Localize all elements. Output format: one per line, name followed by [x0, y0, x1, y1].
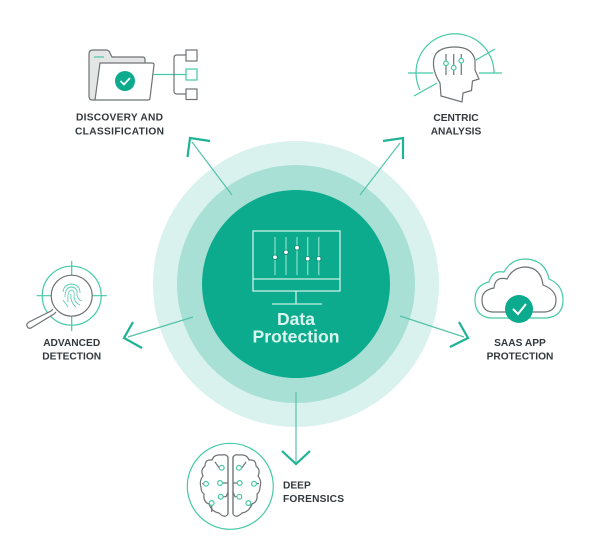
- icon: cloud with check: [475, 259, 563, 323]
- label: centric analysis: [431, 113, 481, 138]
- icon: brain in circle: [187, 443, 273, 529]
- label: advanced detection: [42, 338, 101, 362]
- label: centric analysis: ANALYSIS: [431, 126, 481, 138]
- icon: folder with tree: [89, 50, 197, 100]
- label: advanced detection: DETECTION: [42, 352, 101, 362]
- label: saas app protection: PROTECTION: [487, 352, 553, 362]
- arrow: to discovery: [188, 138, 232, 195]
- label: discovery and classification: [75, 113, 164, 138]
- label: advanced detection: ADVANCED: [43, 338, 100, 349]
- icon: monitor with sliders: [253, 231, 340, 304]
- arrow: to SaaS app protection: [400, 316, 468, 347]
- icon: head with sliders: [408, 34, 502, 102]
- label: centric analysis: CENTRIC: [433, 113, 479, 124]
- label: deep forensics: FORENSICS: [283, 494, 344, 505]
- arrow: to deep forensics: [282, 392, 310, 464]
- label: saas app protection: [487, 338, 553, 362]
- icon: magnifier with fingerprint: [27, 261, 107, 331]
- label: deep forensics: [283, 481, 344, 505]
- arrow: to centric analysis: [360, 138, 403, 195]
- center title: [252, 309, 340, 346]
- label: discovery and classification: DISCOVERY AND: [76, 113, 163, 124]
- center title: Protection: [252, 326, 340, 346]
- label: saas app protection: SAAS APP: [494, 338, 546, 349]
- concentric circles: [153, 141, 439, 427]
- arrow: to advanced detection: [124, 317, 193, 348]
- label: deep forensics: DEEP: [283, 481, 311, 492]
- center title: Data: [277, 309, 315, 329]
- label: discovery and classification: CLASSIFICATION: [75, 126, 164, 138]
